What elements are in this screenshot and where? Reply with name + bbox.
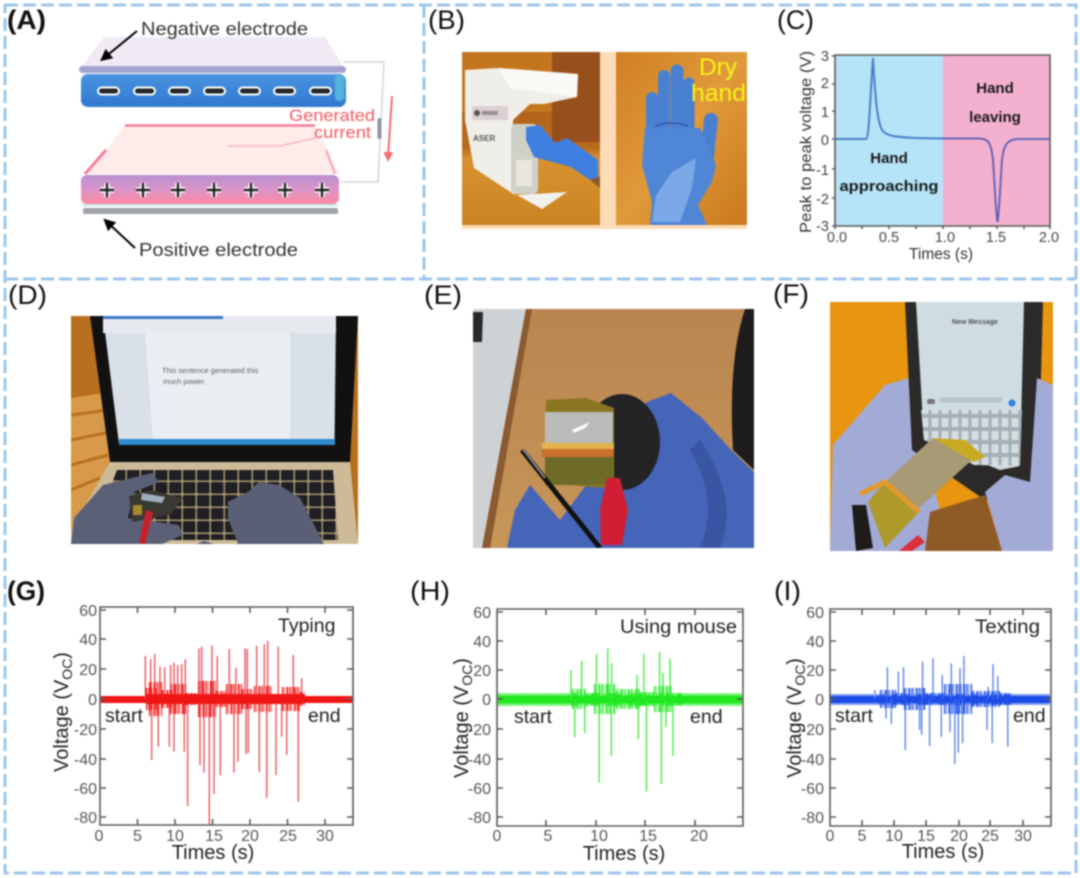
start marker: start [105,705,144,727]
x tick labels: 20 [950,828,968,845]
end marker: end [1013,705,1046,727]
red dense noise band [146,688,305,710]
start marker: start [514,706,553,728]
y tick labels: 20 [806,663,824,680]
y tick labels: 20 [79,662,97,679]
chart frame and ticks [830,609,1051,826]
x tick labels: 0.5 [879,230,899,246]
y tick labels [816,49,829,235]
panel D: laptop typing photo [8,280,358,545]
panel C: peak to peak voltage chart [777,5,1059,263]
y axis title: Voltage (V [784,686,806,778]
label A: (A) [7,5,46,35]
resistor [378,118,382,139]
label F: (F) [773,279,809,309]
y tick labels: -20 [74,722,97,739]
x axis title: Times (s) [902,841,984,863]
x tick labels: 25 [981,828,999,845]
y tick labels: 1 [821,105,829,121]
voltage trace approaching [835,58,943,139]
label E: (E) [424,280,462,310]
negative electrode plate [79,37,346,107]
dry hand caption: hand [691,80,746,107]
y axis title: ) [51,652,73,659]
y axis title: ) [784,658,806,665]
x axis title: Times (s) [583,843,665,865]
using mouse caption: Using mouse [620,616,737,638]
current arrow [388,96,392,158]
hand leaving annotation: leaving [969,109,1021,126]
y tick labels: 60 [806,605,824,622]
y tick labels: -40 [801,752,824,769]
dry hand caption: Dry [699,54,737,81]
blue idle baseline [830,696,1050,703]
green voltage spikes [571,648,673,792]
photo: hand at sanitiser dispenser [462,52,600,225]
x tick labels: 1.5 [986,230,1006,246]
x tick labels [827,230,1059,246]
x tick labels: 1.0 [935,230,955,246]
chart frame and ticks [100,607,353,825]
x tick labels: 20 [690,828,708,845]
y tick labels: -40 [74,752,97,769]
green dense noise band [572,689,682,709]
photo: hand at sanitiser dispenser: ASER [473,134,495,143]
generated current label: Generated [289,106,375,125]
green idle baseline [498,696,742,704]
hand leaving annotation: Hand [976,80,1014,97]
voltage trace leaving [943,138,1050,222]
photo: gloved hand [616,52,747,225]
y tick labels: 0 [88,692,97,709]
on-screen sentence: much power. [163,377,206,386]
y tick labels: 60 [473,605,491,622]
leaving region [943,55,1050,226]
label H: (H) [410,576,450,606]
hand approaching annotation: approaching [840,178,938,195]
y tick labels [468,605,491,827]
y tick labels: 20 [473,663,491,680]
y axis title: Voltage (V [451,686,473,778]
chart frame and ticks [832,55,1050,229]
x tick labels: 25 [279,828,297,845]
label I: (I) [774,576,801,606]
on-screen sentence: This sentence generated this [162,366,259,375]
x tick labels: 0 [493,828,502,845]
generated current label: current [314,123,371,142]
blue voltage spikes [875,656,1008,764]
x tick labels: 10 [885,828,903,845]
y tick labels [801,605,824,827]
y tick labels: 60 [79,603,97,620]
phone photo [830,302,1053,551]
x tick labels: 0 [95,828,104,845]
chart frame and ticks [497,609,743,826]
x tick labels: 2.0 [1039,230,1059,246]
y tick labels: 40 [806,634,824,651]
panel F: phone texting photo [773,279,1053,551]
typing caption: Typing [278,615,335,637]
blue dense noise band [880,690,1012,708]
y tick labels: 40 [79,632,97,649]
y tick labels: -40 [468,752,491,769]
x tick labels: 5 [133,828,142,845]
y axis title: OC [792,665,808,686]
panel B: dry hand photos [428,5,747,229]
y tick labels: -20 [801,722,824,739]
start marker: start [835,705,874,727]
x tick labels: 5 [858,828,867,845]
y tick labels: 0 [821,133,829,149]
x tick labels: 30 [316,828,334,845]
photo strip background [462,52,747,229]
negative electrode label: Negative electrode [141,19,308,39]
label B: (B) [428,5,465,35]
y tick labels: -20 [468,722,491,739]
y tick labels [74,603,97,827]
panel A: triboelectric generator diagram [7,5,392,260]
arrow to positive electrode [107,222,135,248]
panel E: mouse photo [424,280,754,548]
y tick labels: -2 [816,192,829,208]
x tick labels: 15 [917,828,935,845]
y axis title: Voltage (V [51,680,73,772]
mouse photo [473,309,754,548]
phone message heading: New Message [952,319,998,326]
end marker: end [690,706,723,728]
arrow to negative electrode [104,31,137,58]
y axis title: OC [59,659,75,680]
end marker: end [308,705,341,727]
label G: (G) [7,576,45,606]
y tick labels: -1 [816,163,829,179]
external circuit wire [342,62,384,182]
x tick labels: 20 [241,828,259,845]
y tick labels: -80 [74,810,97,827]
x tick labels: 5 [544,828,553,845]
x tick labels [493,828,708,845]
y tick labels: 3 [821,49,829,65]
x tick labels: 15 [205,828,223,845]
x tick labels: 10 [166,828,184,845]
hand approaching annotation: Hand [870,150,908,167]
x tick labels [826,828,1032,845]
y tick labels: -60 [468,781,491,798]
label D: (D) [8,280,47,310]
texting caption: Texting [975,616,1040,638]
x tick labels: 15 [639,828,657,845]
laptop photo [71,316,358,545]
y axis title: OC [459,665,475,686]
panel G: typing voltage chart [7,576,353,864]
label C: (C) [777,5,814,35]
y tick labels: 40 [473,634,491,651]
y axis title: ) [451,658,473,665]
y tick labels: 0 [482,692,491,709]
y tick labels: -60 [801,781,824,798]
panel H: mouse voltage chart [410,576,743,865]
panel I: texting voltage chart [774,576,1051,863]
x tick labels: 10 [590,828,608,845]
y tick labels: -3 [816,219,829,235]
x tick labels: 0 [826,828,835,845]
positive electrode label: Positive electrode [139,240,298,260]
x tick labels [95,828,334,845]
x axis title: Times (s) [909,246,973,263]
x axis title: Times (s) [172,842,254,864]
red idle baseline [101,696,352,703]
y tick labels: -80 [801,810,824,827]
y tick labels: 2 [821,76,829,92]
y tick labels: -60 [74,781,97,798]
approaching region [835,55,943,226]
red voltage spikes [145,641,302,825]
y axis title: Peak to peak voltage (V) [798,51,815,233]
positive electrode plate [81,125,340,214]
y tick labels: 0 [815,692,824,709]
x tick labels: 0.0 [827,230,847,246]
y tick labels: -80 [468,810,491,827]
x tick labels: 30 [1014,828,1032,845]
